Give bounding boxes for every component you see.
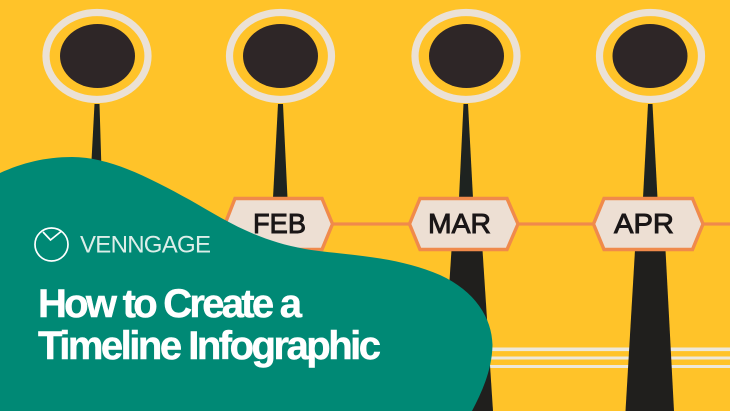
timeline connector line — [0, 222, 730, 226]
icon: Venngage logo — [35, 228, 68, 261]
label: FEB: FEB — [253, 208, 306, 239]
panel: green blob — [0, 157, 492, 411]
label: APR — [594, 198, 703, 250]
title — [38, 282, 381, 368]
marker: February — [230, 12, 332, 198]
marker: January — [46, 12, 148, 170]
label: APR: APR — [614, 208, 674, 239]
marker: March — [415, 12, 517, 411]
label: FEB — [225, 198, 332, 250]
label: MAR — [410, 198, 518, 250]
label: MAR: MAR — [428, 208, 491, 239]
triple white lines — [480, 348, 730, 368]
title: How to Create a — [38, 282, 303, 326]
marker: April — [600, 12, 702, 411]
title: Timeline Infographic — [38, 324, 381, 368]
brand name: VENNGAGE — [80, 232, 211, 258]
